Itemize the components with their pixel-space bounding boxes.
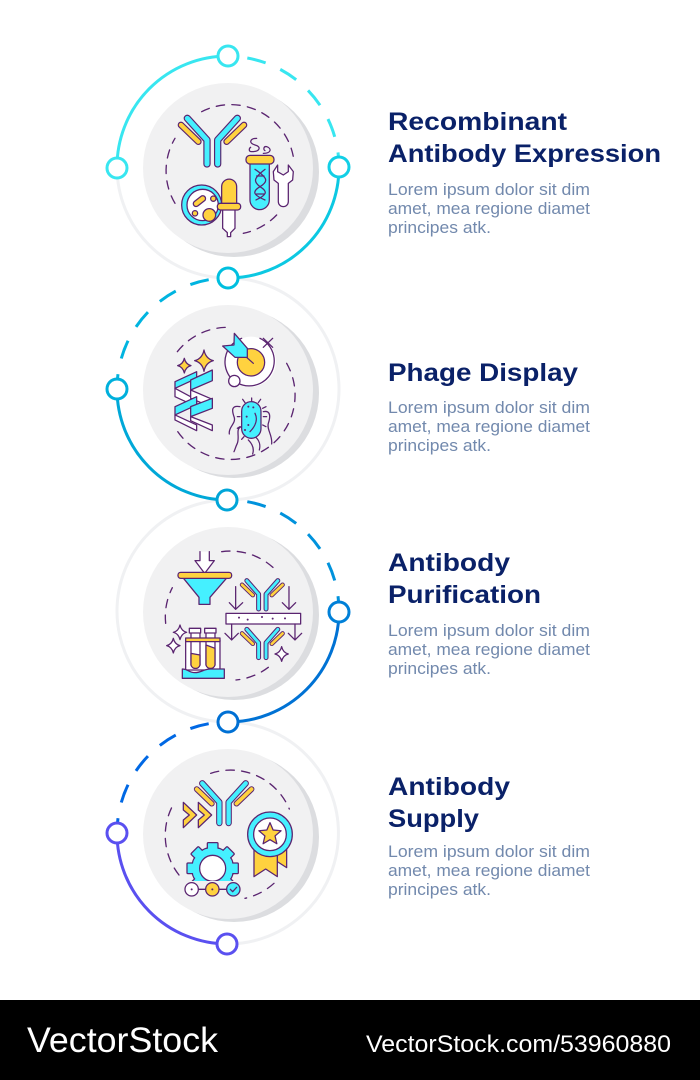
heading: Supply: [388, 805, 479, 833]
heading: Antibody Expression: [388, 140, 661, 168]
description: [388, 399, 590, 455]
panel: recombinant antibody expression: [107, 46, 661, 288]
description: principes atk.: [388, 219, 491, 237]
description: Lorem ipsum dolor sit dim: [388, 622, 590, 640]
step 4 ring connector: [107, 724, 237, 954]
description: amet, mea regione diamet: [388, 862, 590, 880]
heading: Antibody: [388, 773, 510, 801]
description: Lorem ipsum dolor sit dim: [388, 843, 590, 861]
description: amet, mea regione diamet: [388, 418, 590, 436]
description: Lorem ipsum dolor sit dim: [388, 399, 590, 417]
step 2 ring connector: [107, 280, 237, 510]
step 2 disc: [143, 305, 319, 478]
footer watermark bar: VectorStock.com/53960880: [366, 1031, 671, 1058]
heading: [388, 108, 661, 168]
footer watermark bar: [0, 1000, 700, 1080]
heading: Recombinant: [388, 108, 568, 136]
description: Lorem ipsum dolor sit dim: [388, 181, 590, 199]
footer watermark bar: VectorStock: [27, 1021, 219, 1060]
step 3 disc: [143, 527, 319, 700]
heading: [388, 549, 541, 609]
description: [388, 622, 590, 678]
icon: antibody, test tube, petri dish, dropper: [166, 105, 293, 237]
description: principes atk.: [388, 437, 491, 455]
heading: [388, 773, 510, 833]
panel: antibody purification: [143, 502, 590, 732]
description: amet, mea regione diamet: [388, 641, 590, 659]
step 1 disc: [143, 83, 319, 257]
step 4 disc: [143, 749, 319, 922]
description: principes atk.: [388, 881, 491, 899]
icon: funnel, membrane, test tubes: [165, 551, 302, 680]
panel: antibody supply: [107, 724, 590, 954]
heading: Purification: [388, 581, 541, 609]
step 3 ring connector: [218, 502, 349, 732]
icon: target, ribbon, bacterium: [175, 327, 295, 459]
step 1 ring connector: [107, 46, 349, 288]
description: principes atk.: [388, 660, 491, 678]
heading: Phage Display: [388, 359, 578, 387]
description: amet, mea regione diamet: [388, 200, 590, 218]
description: [388, 843, 590, 899]
panel: phage display: [107, 280, 590, 510]
icon: antibody, chevrons, medal, gear: [165, 770, 292, 898]
description: [388, 181, 590, 237]
heading: Antibody: [388, 549, 510, 577]
